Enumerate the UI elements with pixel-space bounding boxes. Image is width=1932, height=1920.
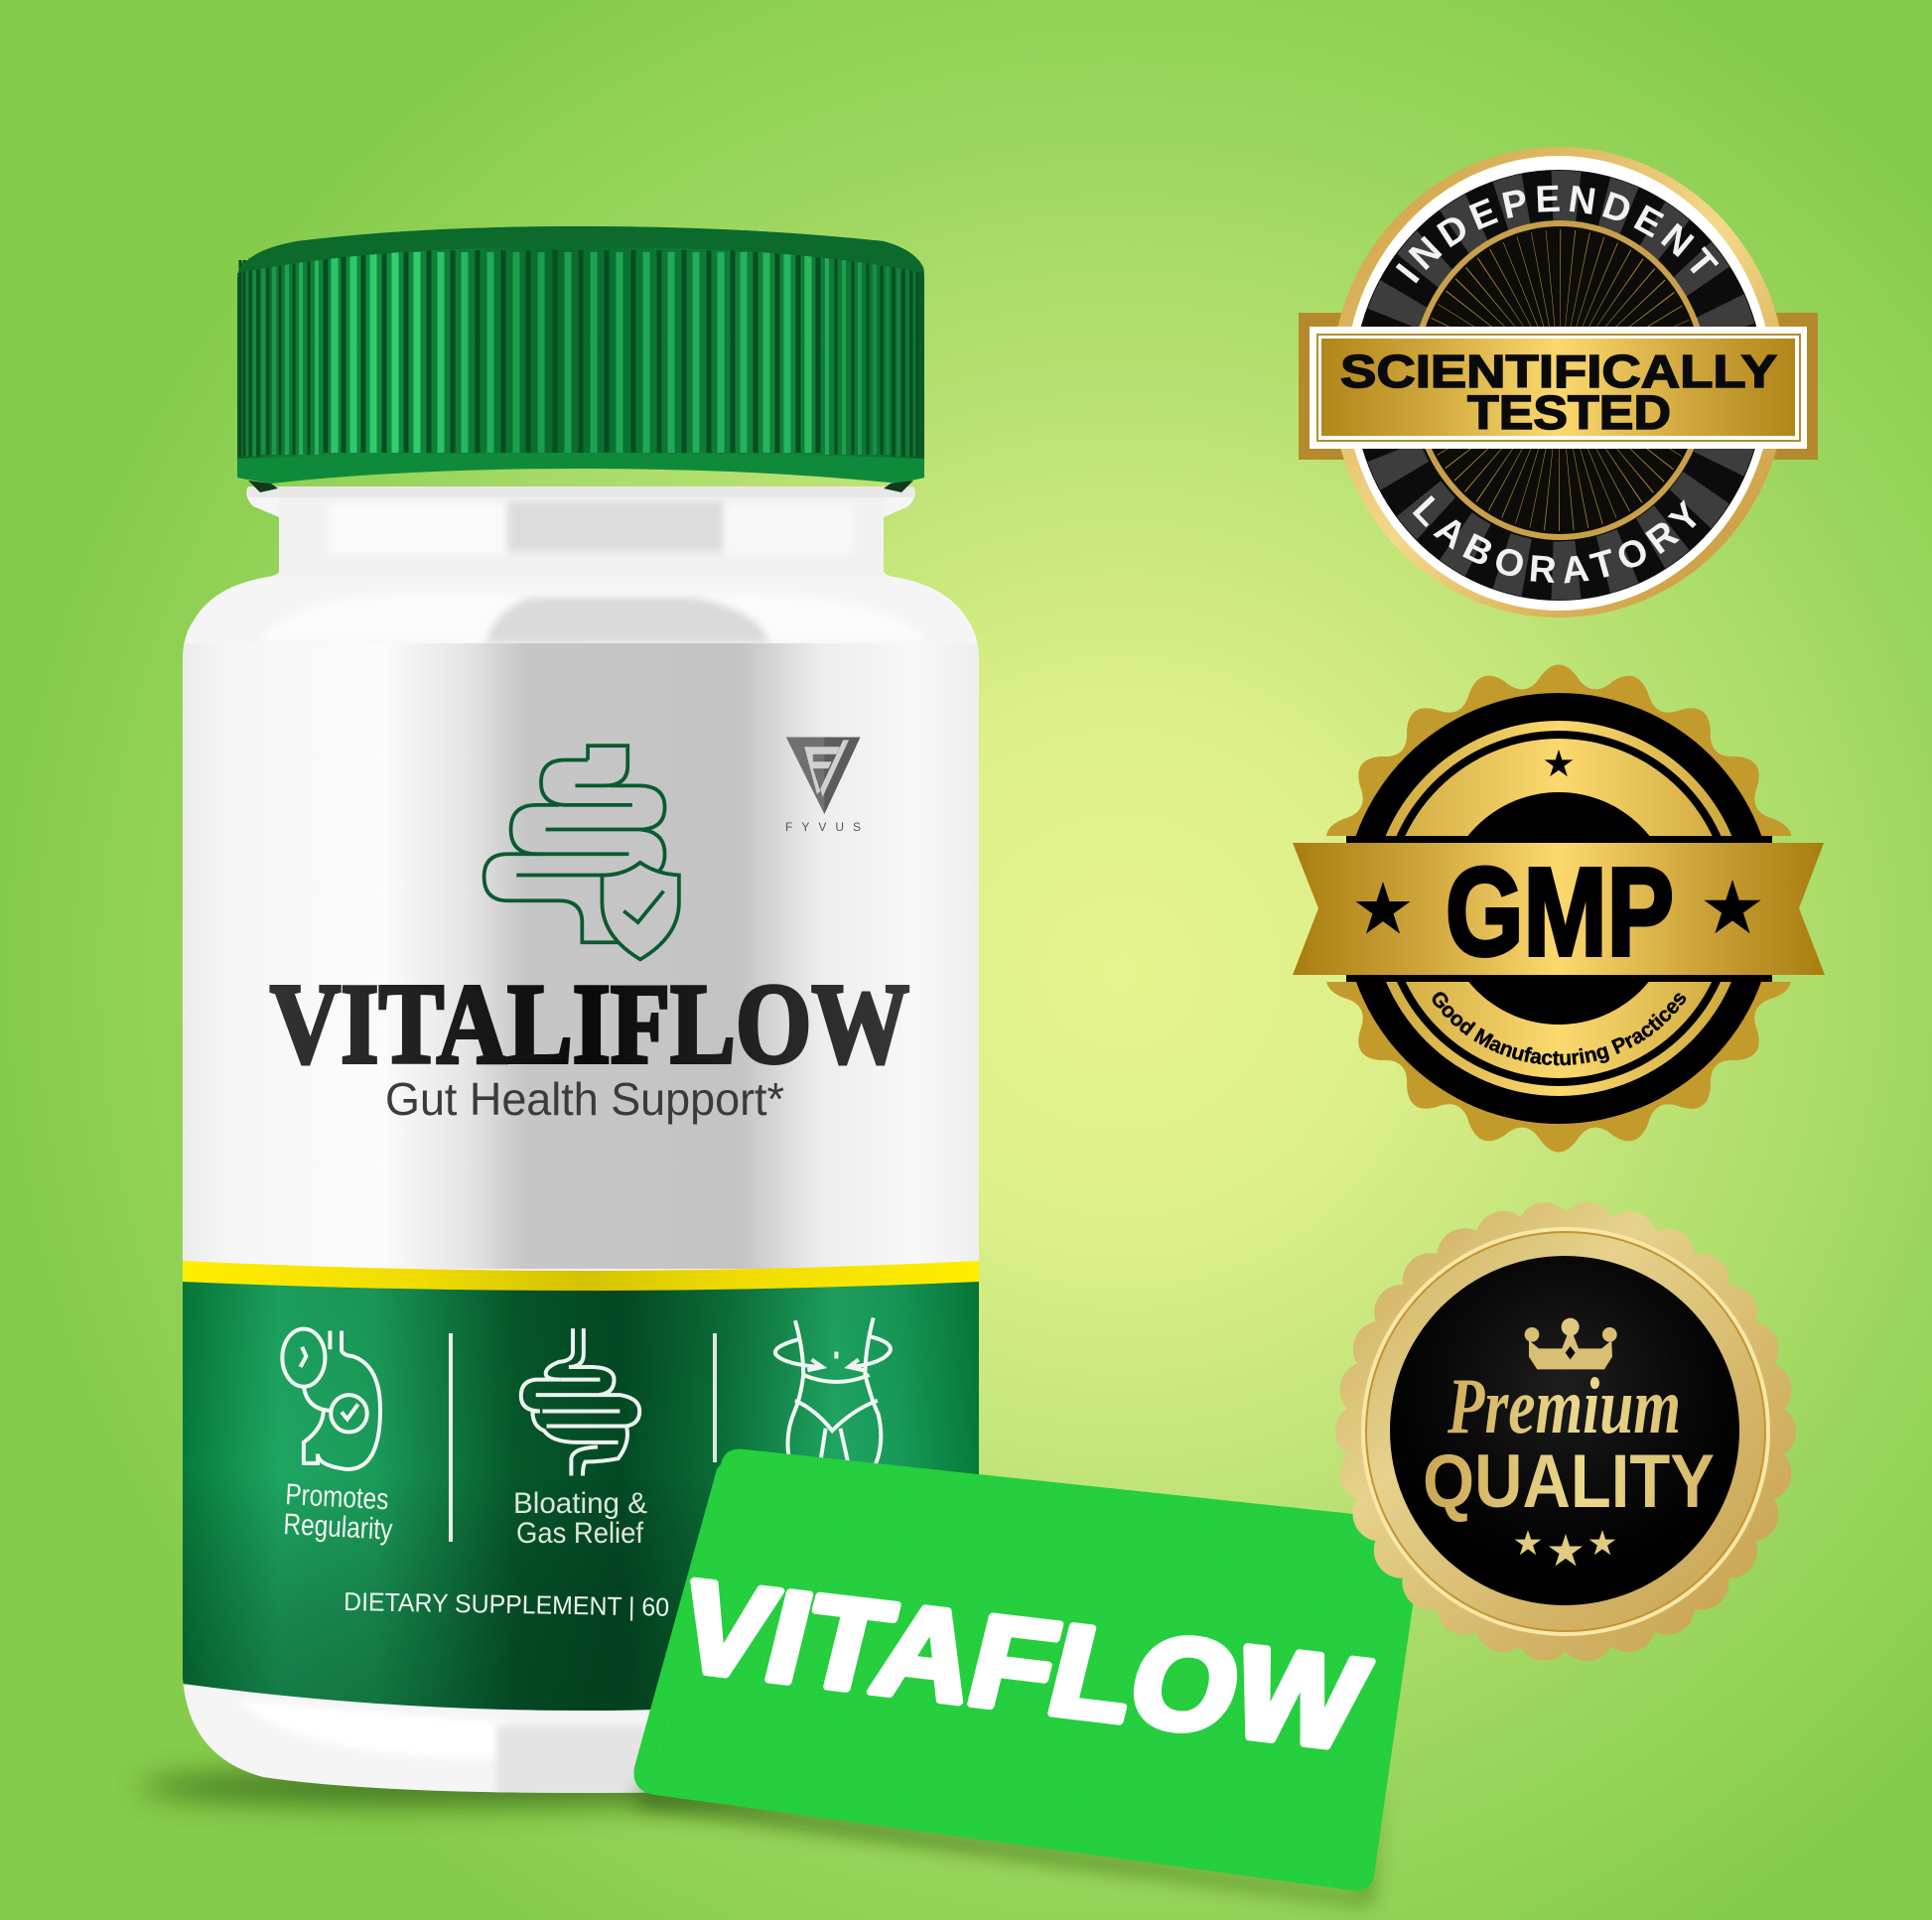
icon: crown [1525, 1318, 1617, 1369]
bottle body [179, 477, 983, 1797]
badge: GMP [1293, 665, 1825, 1152]
label text: Promotes Regularity [283, 1478, 393, 1547]
icon: ribbon star right [1704, 880, 1761, 933]
subtitle: Gut Health Support* [385, 1073, 784, 1125]
label text: dietary supplement: DIETARY SUPPLEMENT | 60 [344, 1586, 669, 1622]
label text: Bloating and Gas Relief: Bloating & [513, 1487, 647, 1520]
seal rings [1361, 1227, 1770, 1636]
icon: three stars [1515, 1530, 1615, 1567]
icon: top star [1545, 750, 1573, 776]
label text: Bloating and Gas Relief [513, 1487, 647, 1550]
FYVUS logo [785, 738, 861, 834]
icon: gut with shield [484, 746, 679, 959]
ribbon text: GMP: GMP [1446, 842, 1674, 982]
badge: premium quality [1357, 1223, 1774, 1640]
bottle cap [237, 226, 924, 492]
badge centre sunburst [1411, 220, 1709, 540]
FYVUS logo: FYVUS [785, 820, 861, 834]
seal rings [1343, 693, 1774, 1124]
label icon: intestine [521, 1328, 639, 1476]
arc text: LABORATORY: LABORATORY [1412, 495, 1697, 584]
arc text: good manufacturing practices: Good Manufacturing Practices [1432, 992, 1686, 1066]
scalloped seal [1357, 1223, 1774, 1640]
gold banner: TESTED [1467, 387, 1671, 440]
label text: Promotes Regularity: Regularity [283, 1508, 393, 1547]
banner tails [1299, 313, 1818, 460]
starburst seal [1314, 665, 1803, 1152]
label icon: stomach and clock [282, 1329, 380, 1469]
icon: ribbon star left [1355, 882, 1411, 933]
green VITAFLOW card [633, 1449, 1422, 1891]
arc text: INDEPENDENT: INDEPENDENT [1396, 185, 1720, 284]
gold banner [1310, 327, 1807, 449]
card shadow [635, 1777, 1382, 1904]
text: QUALITY: QUALITY [1423, 1440, 1715, 1524]
brand name: VITALIFLOW: VITALIFLOW [270, 961, 909, 1088]
ribbon [1293, 843, 1825, 975]
label text: Bloating and Gas Relief: Gas Relief [516, 1517, 644, 1550]
product bottle [179, 226, 983, 1797]
label icon: waist [775, 1317, 891, 1465]
banner text: SCIENTIFICALLY [1340, 345, 1777, 397]
text: Premium: Premium [1447, 1363, 1681, 1450]
card wordmark: VITAFLOW [665, 1554, 1379, 1776]
divider 2 [713, 1333, 717, 1462]
divider 1 [449, 1333, 453, 1542]
badge: independent laboratory scientifically tested [1299, 147, 1818, 617]
bottle shadow [139, 1767, 814, 1807]
badge ring [1331, 147, 1786, 617]
label text: Promotes Regularity: Promotes [285, 1478, 389, 1516]
